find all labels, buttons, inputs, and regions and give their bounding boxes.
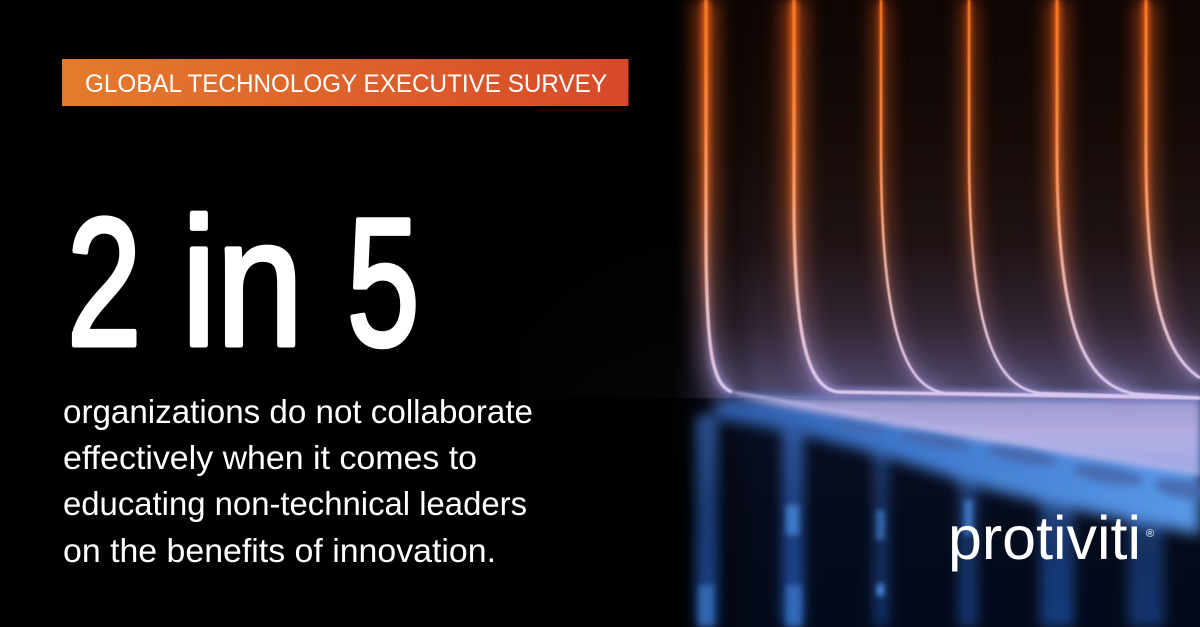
body copy: on the benefits of innovation. (63, 532, 496, 569)
photo: neon light lines on reflective floor (520, 0, 1200, 627)
badge: survey name (62, 59, 628, 106)
badge: survey name: GLOBAL TECHNOLOGY EXECUTIVE SURVEY (85, 70, 607, 98)
neon line halos (706, 0, 1200, 398)
body copy (63, 393, 533, 569)
wall backdrop (520, 0, 1200, 398)
headline statistic: 5 (347, 180, 419, 384)
blue haze on floor (712, 398, 1200, 535)
reflection highlights (698, 500, 973, 627)
body copy: organizations do not collaborate (63, 393, 533, 430)
blue reflection columns (696, 415, 1164, 627)
headline statistic: 2 (67, 180, 141, 384)
logo: protiviti: protiviti (948, 504, 1141, 572)
headline statistic: in (182, 180, 303, 384)
floor streak from first line (732, 392, 870, 416)
dark floor patches (834, 420, 1200, 503)
neon lines (706, 0, 1200, 398)
reflective floor (520, 398, 1200, 627)
logo: protiviti: ® (1146, 528, 1154, 540)
body copy: educating non-technical leaders (63, 485, 527, 522)
neon line wide glows (706, 0, 1200, 394)
lavender floor band (735, 398, 1200, 476)
diagonal floor streak (735, 394, 1200, 472)
body copy: effectively when it comes to (63, 439, 477, 476)
left fade of photo (520, 0, 760, 627)
headline statistic (67, 180, 419, 384)
